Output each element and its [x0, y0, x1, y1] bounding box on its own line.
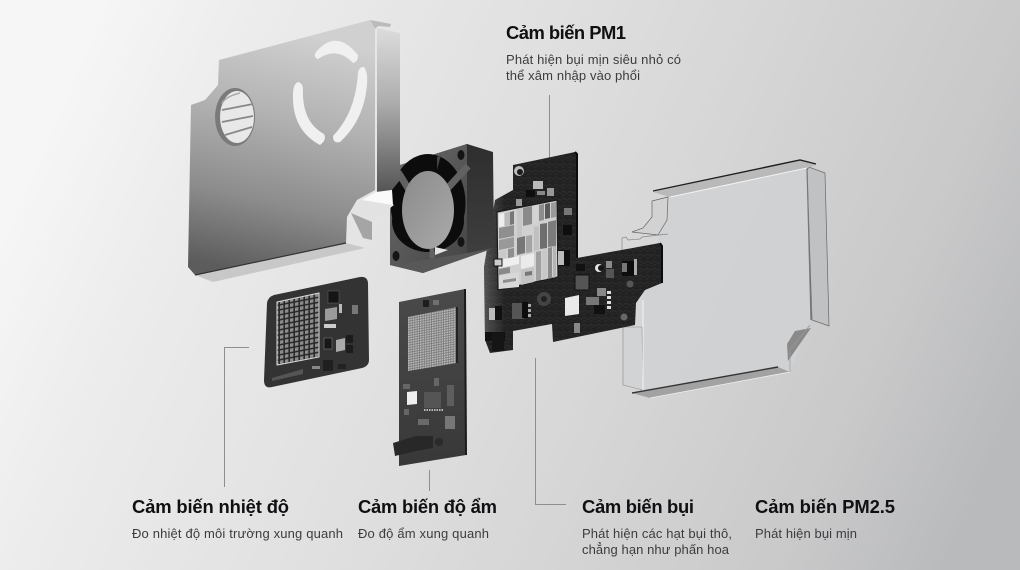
- connector: [393, 436, 433, 456]
- label: PM1: Phát hiện bụi mịn siêu nhỏ có: [506, 52, 681, 67]
- corner tab top: [632, 197, 668, 235]
- top flange: [653, 160, 816, 197]
- leader lines: [224, 95, 566, 504]
- metal cover plate: [188, 20, 400, 282]
- white gap: [435, 247, 448, 255]
- top clip: [370, 20, 391, 29]
- plate body: [188, 20, 375, 275]
- bottom flange: [195, 243, 365, 282]
- components: [485, 166, 637, 351]
- grid chip: [408, 307, 457, 371]
- label: dust: [582, 496, 732, 557]
- board: [399, 289, 466, 466]
- label: PM1: [506, 22, 681, 83]
- label: dust: Cảm biến bụi: [582, 496, 694, 517]
- label: PM1: thể xâm nhập vào phổi: [506, 68, 640, 83]
- label: PM2.5: Phát hiện bụi mịn: [755, 526, 857, 541]
- label: humidity: [358, 496, 497, 541]
- label: PM2.5: [755, 496, 895, 541]
- ring cutouts: [293, 41, 367, 145]
- label: dust: Phát hiện các hạt bụi thô,: [582, 526, 732, 541]
- label: PM1: Cảm biến PM1: [506, 22, 626, 43]
- label: temperature: Cảm biến nhiệt độ: [132, 496, 289, 517]
- side flange: [377, 28, 400, 192]
- fan body and side wall: [390, 144, 494, 273]
- round vent: [215, 88, 255, 146]
- main dust sensor circuit board (PM1): [484, 152, 662, 353]
- right flange: [807, 167, 829, 326]
- corner tab bottom: [787, 328, 811, 361]
- bottom flange: [632, 367, 790, 398]
- label: temperature: Đo nhiệt độ môi trường xung quanh: [132, 526, 343, 541]
- glass frame: PM2.5 sensor: [622, 160, 829, 398]
- board: [484, 152, 662, 353]
- fan: [390, 144, 494, 273]
- label: dust: chẳng hạn như phấn hoa: [582, 542, 730, 557]
- fold tab: [351, 196, 394, 222]
- label: humidity: Đo độ ẩm xung quanh: [358, 526, 489, 541]
- label: humidity: Cảm biến độ ẩm: [358, 496, 497, 517]
- fan bottom wall: [390, 248, 494, 273]
- left speckled area: [484, 195, 505, 345]
- fan ring opening: [390, 154, 466, 252]
- temperature sensor board: [264, 277, 369, 387]
- board: [264, 277, 369, 387]
- board edge: [575, 152, 662, 283]
- left flange: [623, 327, 643, 390]
- mounting holes: [392, 150, 464, 261]
- connector: [272, 369, 303, 381]
- fan blade highlight: [437, 155, 441, 170]
- processor die: [497, 200, 558, 290]
- glass panel: [642, 168, 810, 392]
- fan hub: [402, 171, 454, 249]
- label: PM2.5: Cảm biến PM2.5: [755, 496, 895, 517]
- grid chip: [277, 293, 319, 365]
- components: [312, 291, 358, 371]
- fan struts: [398, 166, 468, 258]
- humidity sensor board: [393, 289, 466, 466]
- label: temperature: [132, 496, 343, 541]
- components: [403, 300, 455, 429]
- fan front face: [390, 145, 467, 265]
